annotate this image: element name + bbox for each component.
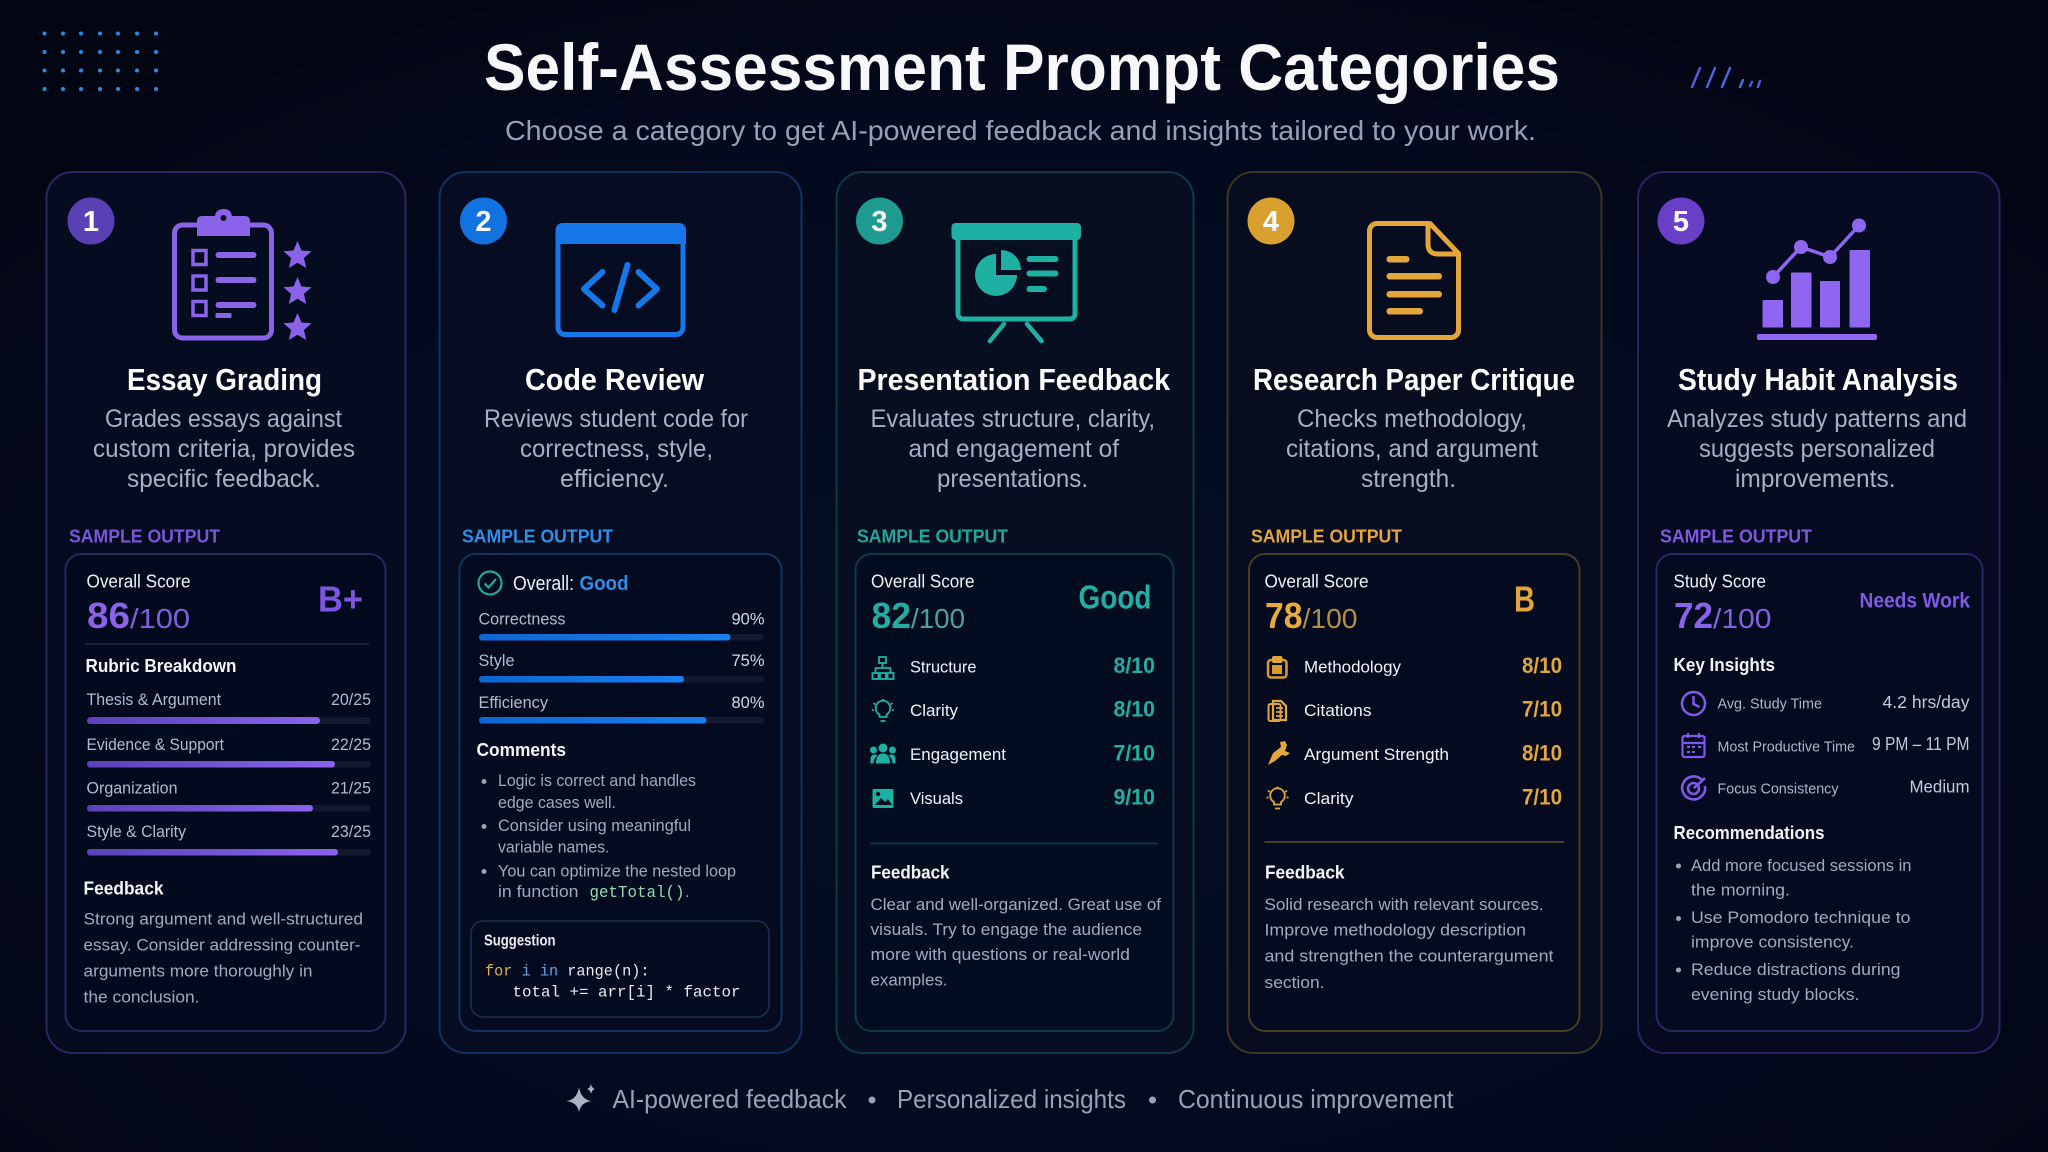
suggestion code box [471,921,769,1017]
insight: most productive time: 9 PM – 11 PM [1872,734,1970,754]
sample output panel [66,554,386,1031]
feedback: section. [1264,973,1324,992]
description [93,405,355,493]
row: argument strength: 8/10 [1522,740,1562,766]
study score [1674,572,1772,636]
feedback: Strong argument and well-structured [84,910,363,928]
rubric row: style: Style & Clarity [86,822,186,841]
insight: most productive time: Most Productive Time [1718,738,1855,756]
overall score: /100 [911,603,965,634]
title: Self-Assessment Prompt Categories [484,30,1560,104]
comments: You can optimize the nested loop [498,862,736,880]
feedback: more with questions or real-world [870,945,1130,964]
row: citations: Citations [1304,701,1372,720]
rubric breakdown heading: Rubric Breakdown [86,656,236,676]
heading: Essay Grading [127,362,322,397]
description: Reviews student code for [484,405,748,433]
description: presentations. [937,465,1088,493]
badge 2 [460,198,507,244]
row: visuals [872,784,1155,810]
rubric row: style [86,822,371,856]
panel: essay grading [46,172,406,1053]
heading: Code Review [525,362,705,397]
icon: sparkle [566,1084,595,1112]
metric: style: Style [478,651,514,670]
row: methodology [1268,653,1562,678]
sample output label: SAMPLE OUTPUT [69,526,220,546]
sample output panel [856,554,1174,1031]
insight: most productive time [1682,733,1970,757]
overall rating: Overall: [513,573,574,595]
sample output label: SAMPLE OUTPUT [857,526,1008,546]
heading: Presentation Feedback [858,362,1171,397]
feedback: arguments more thoroughly in [84,962,312,980]
overall score [86,572,190,636]
overall score [871,572,974,636]
overall score: Overall Score [86,572,190,592]
key insights heading: Key Insights [1674,655,1775,675]
feedback: Feedback [871,862,950,882]
overall score: 78 [1265,595,1302,636]
row: structure [872,653,1155,679]
insight: focus consistency: Focus Consistency [1718,780,1839,798]
row: engagement: Engagement [910,745,1006,764]
feedback: Solid research with relevant sources. [1264,895,1544,914]
row: visuals: Visuals [910,789,963,808]
sample output panel [1656,554,1982,1031]
feedback: Improve methodology description [1264,920,1526,940]
feedback: examples. [870,970,948,990]
metric: efficiency: Efficiency [478,693,548,712]
rubric row: organization [86,778,371,812]
overall score: Overall Score [871,572,974,592]
badge 3 [856,198,903,244]
row: citations [1268,696,1562,722]
rubric row: organization: 21/25 [331,778,371,798]
panel: presentation feedback [836,172,1194,1053]
study score: /100 [1713,603,1772,634]
sample output label: SAMPLE OUTPUT [1660,526,1812,546]
feedback [84,878,363,1006]
feedback [1264,862,1554,992]
description: strength. [1361,465,1456,493]
badge 5: 5 [1673,206,1689,238]
comments [476,740,736,902]
recommendations: Recommendations [1674,823,1824,843]
row: argument strength [1268,740,1562,766]
comments: . [685,882,690,901]
feedback: Clear and well-organized. Great use of [870,895,1161,914]
description: efficiency. [560,465,669,493]
comments: in function [498,882,578,901]
rubric row: evidence: Evidence & Support [86,735,224,754]
card frame [836,172,1194,1053]
badge 4 [1248,198,1294,244]
metric: efficiency [478,693,764,724]
feedback: Feedback [84,878,164,898]
recommendations: evening study blocks. [1691,985,1860,1004]
overall score [1264,572,1368,636]
insight: avg study time: Avg. Study Time [1718,696,1822,712]
recommendations [1674,823,1912,1004]
row: visuals: 9/10 [1114,784,1155,810]
description: Analyzes study patterns and [1667,405,1967,433]
row: engagement: 7/10 [1114,740,1155,766]
insight: focus consistency [1682,776,1970,799]
description: specific feedback. [127,465,321,493]
rubric row: evidence [86,735,371,768]
panel: research paper critique [1228,172,1602,1053]
recommendations: the morning. [1691,880,1790,900]
study score: 72 [1674,595,1713,636]
icon: growth chart [1757,218,1877,340]
rubric row: thesis [86,690,371,724]
metric: style [478,651,764,682]
row: argument strength: Argument Strength [1304,745,1449,764]
icon: document [1370,224,1458,338]
rubric row: evidence: 22/25 [331,735,371,754]
row: methodology: Methodology [1304,658,1401,676]
row: methodology: 8/10 [1522,653,1562,678]
description: and engagement of [908,435,1119,463]
icon: clipboard with stars [174,209,312,340]
overall score: /100 [130,603,190,634]
description: suggests personalized [1699,435,1935,463]
description [870,405,1155,493]
sample output panel [460,554,782,1031]
feedback: visuals. Try to engage the audience [870,920,1142,939]
recommendations: improve consistency. [1691,932,1854,952]
row: clarity [1266,784,1562,810]
recommendations: Reduce distractions during [1691,960,1900,979]
footer tagline: Personalized insights [897,1084,1126,1114]
recommendations: Add more focused sessions in [1691,856,1912,875]
description: Grades essays against [105,405,342,433]
heading: Research Paper Critique [1253,362,1575,397]
card frame [1638,172,2000,1053]
metric: correctness: Correctness [478,610,566,628]
badge 1: 1 [83,206,99,238]
panel: code review [440,172,802,1053]
feedback: essay. Consider addressing counter- [84,936,360,954]
feedback: Feedback [1265,862,1345,882]
suggestion code box: for i in range(n): [485,962,650,980]
description: improvements. [1735,465,1896,493]
feedback: and strengthen the counterargument [1264,946,1554,966]
badge 4: 4 [1263,206,1279,238]
grade: Good [1078,578,1152,616]
feedback [870,862,1161,990]
comments: Consider using meaningful [498,816,691,835]
insight: avg study time [1682,692,1970,715]
sample output label: SAMPLE OUTPUT [462,526,613,546]
badge 3: 3 [871,206,888,238]
row: structure: Structure [910,658,976,676]
feedback: the conclusion. [84,988,200,1006]
footer tagline: Continuous improvement [1178,1084,1454,1114]
icon: presentation board [952,223,1081,341]
description [484,405,748,493]
footer tagline: AI-powered feedback [612,1084,847,1114]
badge 1 [68,198,114,244]
comments: getTotal() [590,883,684,902]
description [1286,405,1538,493]
comments: edge cases well. [498,793,616,812]
rubric row: organization: Organization [86,778,178,798]
row: clarity: Clarity [910,701,958,720]
description: Evaluates structure, clarity, [870,405,1155,433]
metric: correctness: 90% [732,610,764,628]
overall score: 86 [87,595,130,636]
rubric row: thesis: Thesis & Argument [86,690,221,709]
overall score: 82 [872,595,911,636]
overall rating: Good [580,573,628,595]
footer tagline [566,1084,1454,1114]
subtitle: Choose a category to get AI-powered feedback and insights tailored to your work. [505,115,1536,146]
card frame [1228,172,1602,1053]
panel: study habit analysis [1638,172,2000,1053]
sample output panel [1249,554,1580,1031]
row: clarity: Clarity [1304,789,1354,808]
row: engagement [870,740,1155,766]
row: clarity: 8/10 [1114,696,1155,722]
grade: B [1514,578,1535,620]
description: Checks methodology, [1297,405,1527,433]
recommendations: Use Pomodoro technique to [1691,908,1910,927]
rubric row: style: 23/25 [331,822,371,841]
study score: Study Score [1674,572,1766,592]
row: clarity [872,696,1155,722]
heading: Study Habit Analysis [1678,362,1958,397]
description [1667,405,1967,493]
icon: code window [555,223,686,334]
description: correctness, style, [520,435,713,463]
rubric row: thesis: 20/25 [331,690,371,709]
row: citations: 7/10 [1522,696,1562,722]
badge 5 [1658,198,1704,244]
description: citations, and argument [1286,435,1538,463]
row: structure: 8/10 [1114,653,1155,678]
metric: correctness [478,610,764,640]
insight: focus consistency: Medium [1910,776,1970,796]
insight: avg study time: 4.2 hrs/day [1882,692,1970,712]
badge 2: 2 [475,206,492,238]
description: custom criteria, provides [93,435,355,463]
comments: Comments [476,740,566,760]
metric: style: 75% [732,651,764,670]
sample output label: SAMPLE OUTPUT [1251,526,1402,546]
overall score: /100 [1302,603,1358,634]
row: clarity: 7/10 [1522,784,1562,810]
suggestion code box: Suggestion [484,932,556,950]
comments: Logic is correct and handles [498,771,696,790]
rating: Needs Work [1860,590,1970,612]
card frame [440,172,802,1053]
card frame [46,172,406,1053]
metric: efficiency: 80% [732,693,764,712]
grade: B+ [318,578,363,620]
overall score: Overall Score [1264,572,1368,592]
comments: variable names. [498,838,610,856]
overall rating [478,572,628,595]
suggestion code box: total += arr[i] * factor [512,984,740,1002]
